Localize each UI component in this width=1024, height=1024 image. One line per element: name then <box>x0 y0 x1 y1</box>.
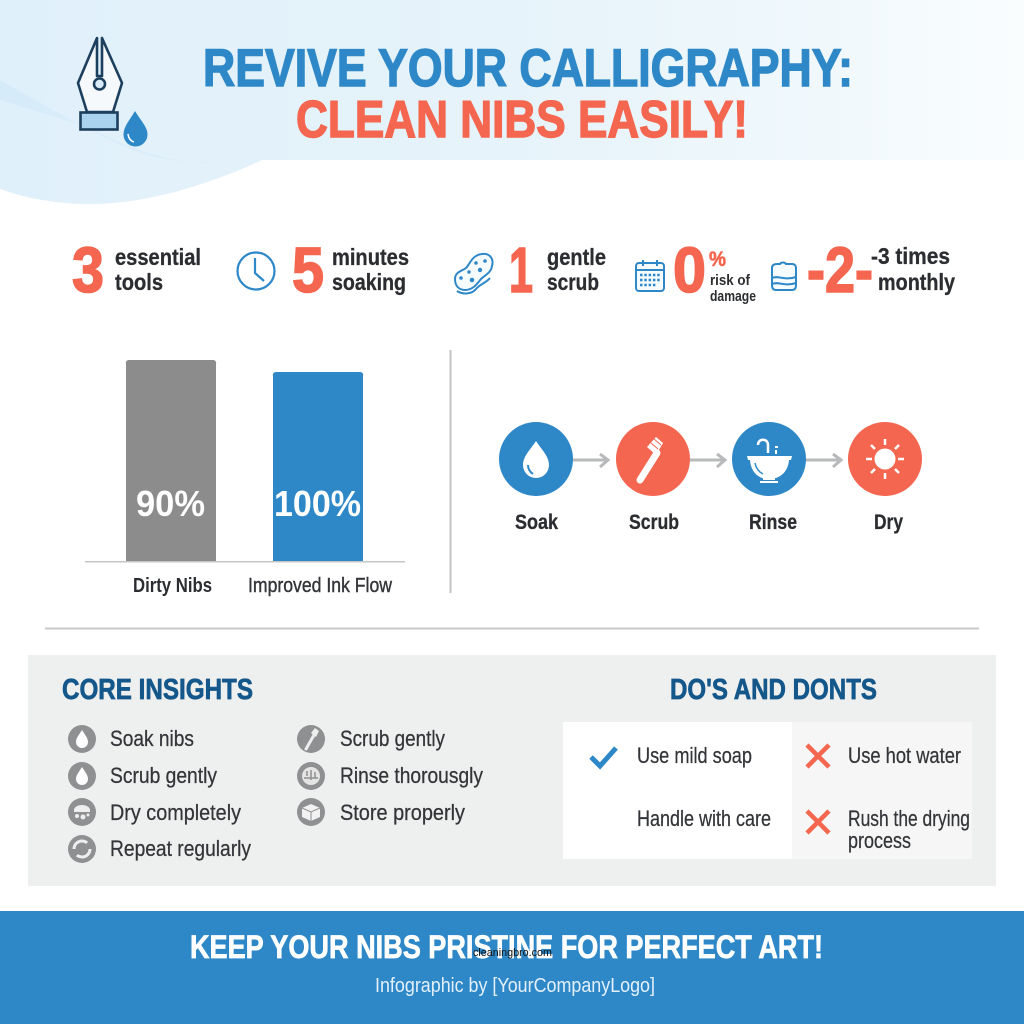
step: dry: Dry <box>874 511 903 534</box>
stat: 1 gentle scrub: scrub <box>547 269 599 295</box>
step: scrub <box>616 422 690 534</box>
item: repeat regularly: Repeat regularly <box>110 836 251 861</box>
bar: dirty nibs <box>126 360 216 561</box>
don'ts column: Use hot water <box>848 743 961 768</box>
watermark: cleaningbro.com <box>473 947 552 959</box>
step: soak <box>499 422 573 534</box>
stat: 0% risk of damage: % <box>709 248 726 271</box>
item: store properly: Store properly <box>340 800 465 825</box>
stat: 3 essential tools: essential <box>115 244 201 270</box>
heading: core insights: CORE INSIGHTS <box>62 674 253 706</box>
item: scrub gently 2 <box>297 725 445 753</box>
icon: clock <box>238 252 274 290</box>
panel: bottom insights <box>28 655 996 886</box>
item: dry completely: Dry completely <box>110 800 241 825</box>
stat: 0% risk of damage: risk of <box>710 272 751 289</box>
item: dry completely <box>68 798 241 826</box>
stat: 1 gentle scrub: 1 <box>509 234 533 306</box>
stat: 0% risk of damage: 0 <box>673 234 706 306</box>
stat: 5 minutes soaking: 5 <box>292 234 324 306</box>
step: soak: Soak <box>515 511 558 534</box>
title: CLEAN NIBS EASILY! <box>296 91 748 149</box>
process flow <box>499 422 922 534</box>
item: scrub gently <box>68 762 217 790</box>
stat: 3 essential tools: 3 <box>72 234 104 306</box>
stat: 0% risk of damage <box>673 234 756 306</box>
step: rinse: Rinse <box>749 511 797 534</box>
arrow <box>573 454 608 467</box>
title <box>203 39 853 149</box>
don'ts column: Rush the drying <box>848 806 970 831</box>
do's column: Use mild soap <box>637 743 752 768</box>
item: rinse thoroughly <box>297 762 483 790</box>
icon: fountain pen nib with ink drop <box>78 38 148 146</box>
footer credit: Infographic by [YourCompanyLogo] <box>375 975 655 997</box>
icon: folded towel <box>772 262 796 290</box>
title: REVIVE YOUR CALLIGRAPHY: <box>203 39 853 98</box>
heading: do's and donts: DO'S AND DONTS <box>670 674 877 706</box>
stat: 5 minutes soaking: soaking <box>332 269 406 295</box>
item: soak nibs <box>68 725 194 753</box>
stat: 2-3 times monthly: -2- <box>807 234 873 306</box>
icon: sponge <box>455 254 493 293</box>
item: store properly <box>297 798 465 826</box>
footer banner <box>0 911 1024 1024</box>
item: rinse thoroughly: Rinse thorousgly <box>340 763 483 788</box>
arrow <box>806 454 841 467</box>
item: repeat regularly <box>68 835 251 863</box>
stat: 3 essential tools <box>72 234 201 306</box>
stat: 0% risk of damage: damage <box>710 288 756 305</box>
bar chart <box>85 360 405 597</box>
header wave background <box>0 0 1024 204</box>
stat: 1 gentle scrub <box>509 234 606 306</box>
stat: 3 essential tools: tools <box>115 269 163 295</box>
item: scrub gently 2: Scrub gently <box>340 726 445 751</box>
bar: dirty nibs: 90% <box>136 483 205 524</box>
step: scrub: Scrub <box>629 511 679 534</box>
bar: improved ink flow <box>273 372 363 561</box>
don'ts column: process <box>848 828 911 853</box>
do's column: Handle with care <box>637 806 771 831</box>
stat: 2-3 times monthly: monthly <box>878 269 955 295</box>
stat: 2-3 times monthly <box>807 234 955 306</box>
do's column <box>563 722 792 859</box>
arrow <box>690 454 725 467</box>
stat row <box>72 234 955 306</box>
don'ts column <box>792 722 972 859</box>
stat: 5 minutes soaking: minutes <box>332 244 409 270</box>
bar: improved ink flow: 100% <box>274 483 361 524</box>
stat: 2-3 times monthly: -3 times <box>871 243 950 269</box>
step: rinse <box>732 422 806 534</box>
bar label: improved ink flow: Improved Ink Flow <box>248 575 392 597</box>
step: dry <box>848 422 922 534</box>
stat: 1 gentle scrub: gentle <box>547 244 606 270</box>
item: scrub gently: Scrub gently <box>110 763 217 788</box>
item: soak nibs: Soak nibs <box>110 726 194 751</box>
stat: 5 minutes soaking <box>292 234 409 306</box>
footer headline: KEEP YOUR NIBS PRISTINE FOR PERFECT ART! <box>190 929 823 965</box>
icon: calendar <box>636 260 664 291</box>
bar label: dirty nibs: Dirty Nibs <box>133 575 212 597</box>
